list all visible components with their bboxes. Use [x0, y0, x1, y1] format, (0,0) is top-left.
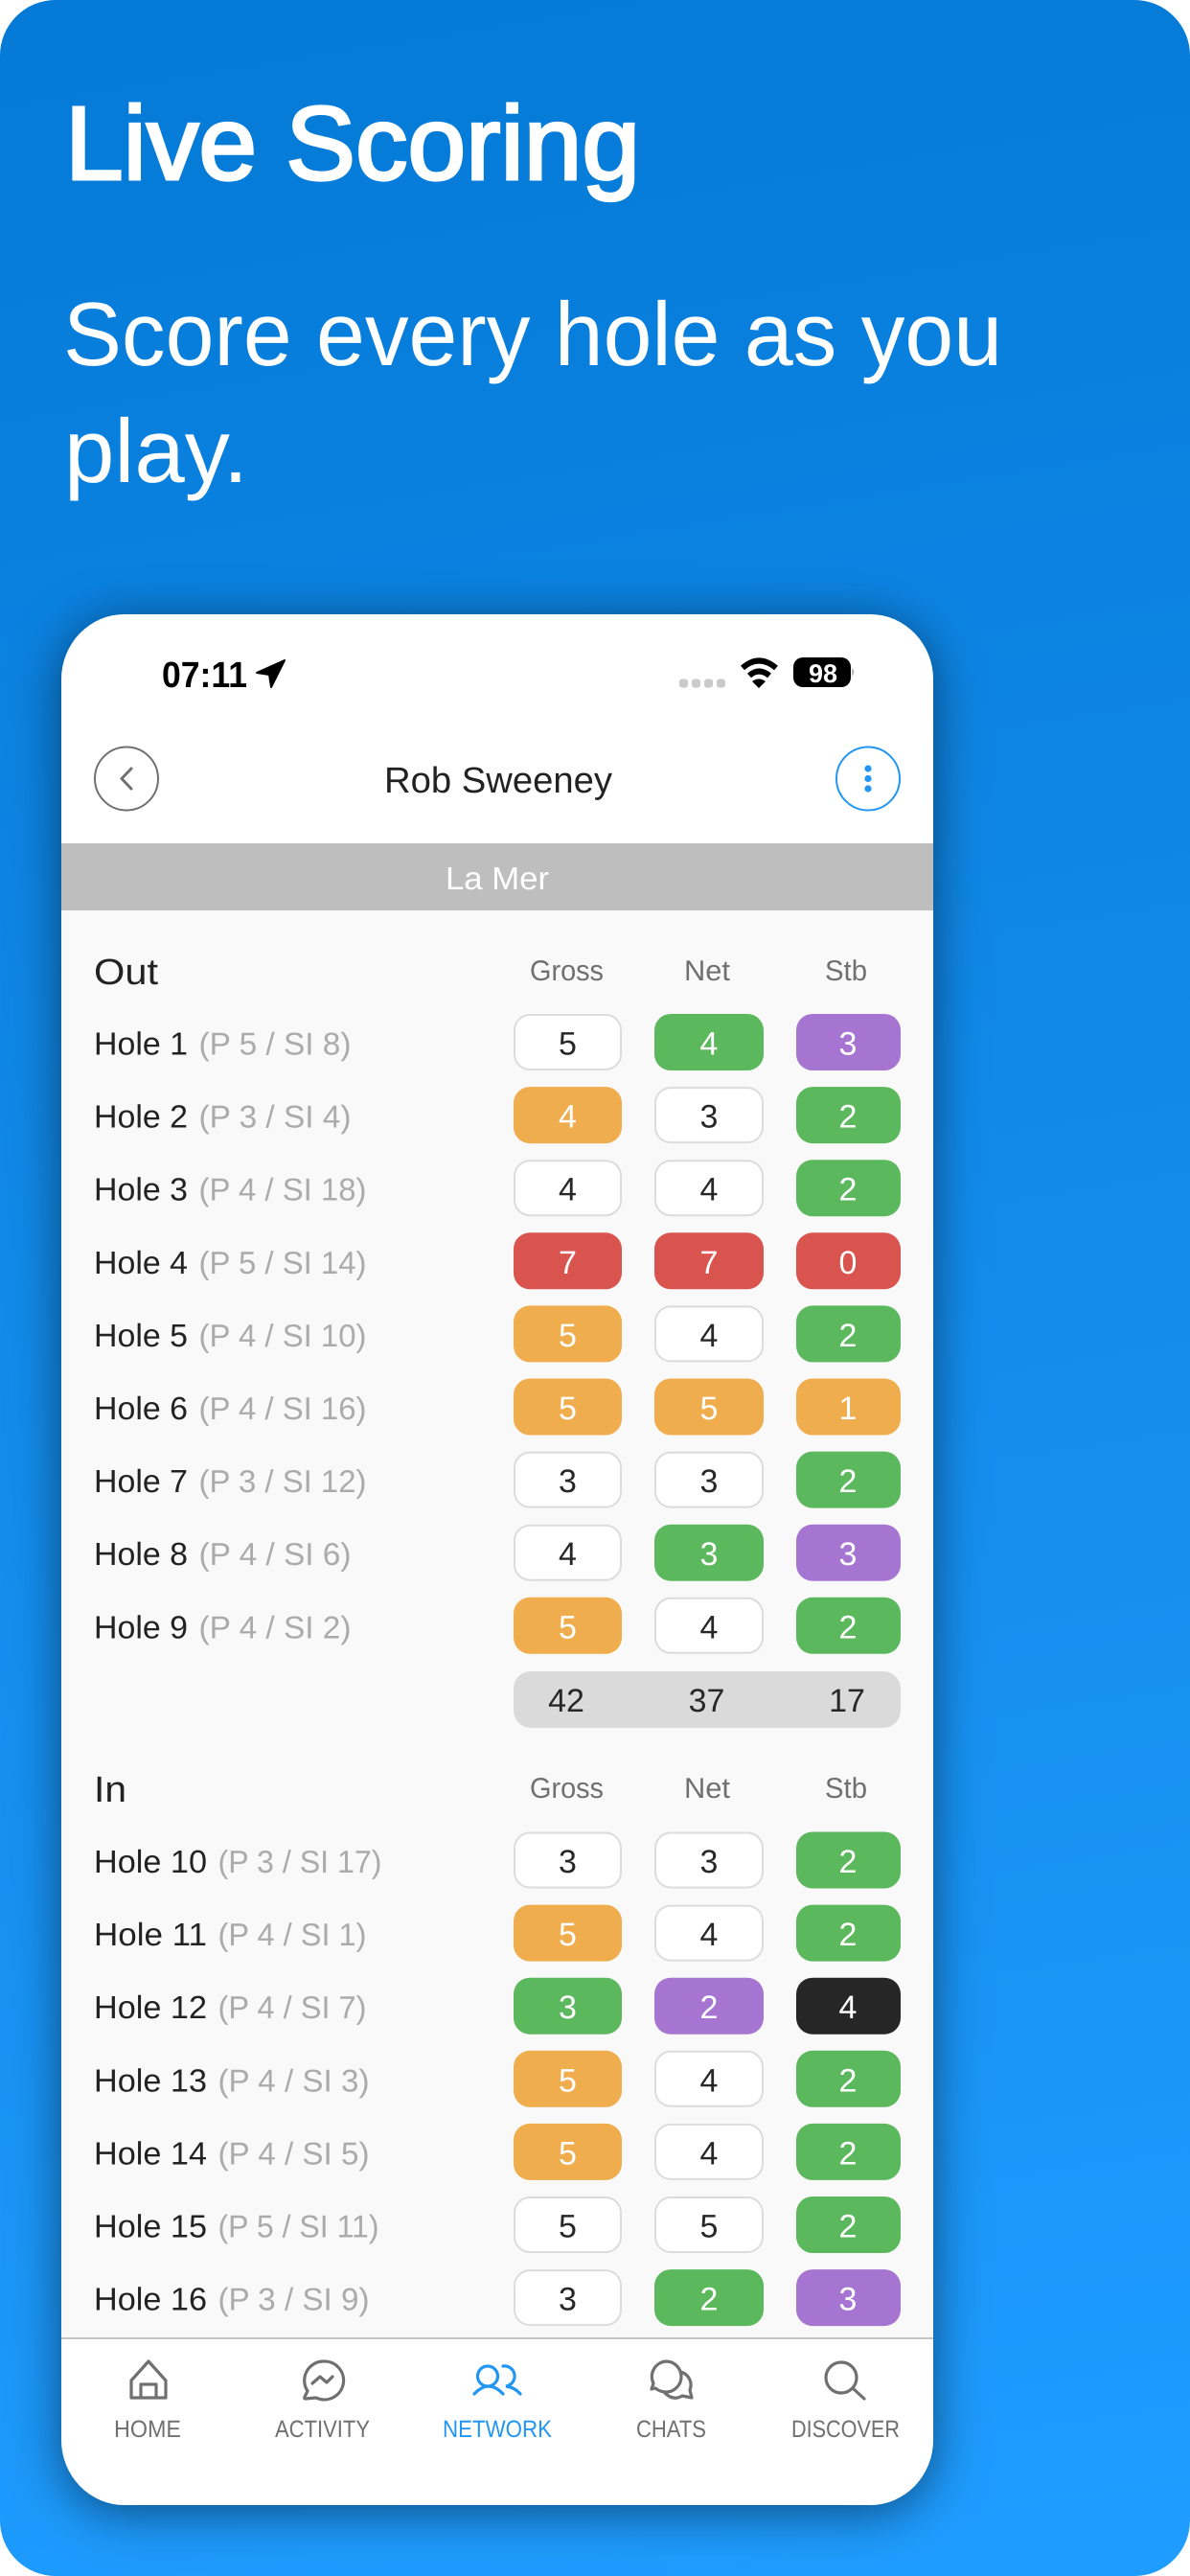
subtitle — [63, 284, 1002, 501]
row: hole 4: 7 — [559, 1245, 577, 1281]
row: hole 12: (P 4 / SI 7) — [218, 1990, 366, 2025]
row: hole 9: (P 4 / SI 2) — [199, 1609, 351, 1644]
row: hole 1: 5 — [559, 1025, 577, 1062]
row: hole 4: (P 5 / SI 14) — [199, 1245, 366, 1280]
nav item: home — [114, 2361, 181, 2443]
row: hole 11: (P 4 / SI 1) — [218, 1917, 366, 1952]
status bar — [162, 656, 855, 696]
row: hole 11: 4 — [700, 1917, 718, 1953]
nav item: home: HOME — [114, 2416, 181, 2443]
row: hole 10: (P 3 / SI 17) — [218, 1844, 381, 1879]
row: hole 14: 4 — [700, 2135, 718, 2172]
nav item: chats — [636, 2361, 706, 2443]
row: hole 8: Hole 8 — [94, 1537, 188, 1573]
row: hole 16: Hole 16 — [94, 2283, 207, 2318]
row: hole 4 — [94, 1232, 901, 1289]
row: hole 11: Hole 11 — [94, 1918, 207, 1953]
scorecard body — [61, 910, 933, 2337]
status bar: 98 — [809, 659, 837, 688]
row: hole 6: Hole 6 — [94, 1392, 188, 1427]
row: hole 2: 3 — [700, 1099, 718, 1136]
row: hole 13: 4 — [700, 2062, 718, 2099]
row: hole 11 — [94, 1905, 901, 1962]
row: hole 7: 2 — [839, 1463, 857, 1500]
row: hole 7: Hole 7 — [94, 1464, 188, 1500]
row: hole 16 — [94, 2269, 901, 2326]
row: hole 2: Hole 2 — [94, 1100, 188, 1136]
out section header: Gross — [530, 955, 604, 987]
row: hole 10 — [94, 1832, 901, 1888]
row: hole 5 — [94, 1305, 901, 1362]
row: hole 3: Hole 3 — [94, 1173, 188, 1208]
row: hole 12: 2 — [700, 1990, 718, 2026]
row: hole 16: 3 — [839, 2282, 857, 2318]
row: hole 9: 2 — [839, 1609, 857, 1645]
row: hole 1: Hole 1 — [94, 1027, 188, 1062]
out section header: Net — [684, 955, 731, 987]
row: hole 7: 3 — [700, 1463, 718, 1500]
row: hole 5: 4 — [700, 1318, 718, 1354]
nav item: chats: CHATS — [636, 2416, 706, 2443]
row: hole 2: 2 — [839, 1099, 857, 1136]
row: hole 8: (P 4 / SI 6) — [199, 1536, 351, 1572]
row: hole 14: Hole 14 — [94, 2136, 207, 2172]
nav item: discover: DISCOVER — [791, 2416, 900, 2443]
row: hole 2 — [94, 1087, 901, 1143]
row: hole 5: 5 — [559, 1318, 577, 1354]
out section header — [94, 953, 867, 993]
row: hole 13 — [94, 2051, 901, 2107]
out totals: 37 — [689, 1683, 724, 1719]
row: hole 6: 5 — [700, 1391, 718, 1427]
status bar: 07:11 — [162, 656, 247, 696]
row: hole 10: 2 — [839, 1844, 857, 1880]
row: hole 1 — [94, 1014, 901, 1070]
row: hole 6: 5 — [559, 1391, 577, 1427]
row: hole 2: (P 3 / SI 4) — [199, 1099, 351, 1135]
in section header: Net — [684, 1773, 731, 1805]
out totals — [514, 1671, 901, 1728]
phone screen panel — [61, 614, 933, 2505]
row: hole 10: 3 — [700, 1844, 718, 1880]
row: hole 9 — [94, 1598, 901, 1654]
row: hole 8 — [94, 1525, 901, 1581]
row: hole 10: 3 — [559, 1844, 577, 1880]
in section header: In — [94, 1770, 126, 1810]
row: hole 9: 5 — [559, 1609, 577, 1645]
menu button icon — [836, 748, 900, 811]
row: hole 9: Hole 9 — [94, 1610, 188, 1645]
row: hole 14: (P 4 / SI 5) — [218, 2135, 370, 2171]
player name heading: Rob Sweeney — [384, 761, 612, 801]
row: hole 12: 3 — [559, 1990, 577, 2026]
row: hole 7: (P 3 / SI 12) — [199, 1463, 366, 1499]
back button icon — [95, 748, 158, 811]
row: hole 12: 4 — [839, 1990, 857, 2026]
row: hole 7: 3 — [559, 1463, 577, 1500]
course banner — [61, 843, 933, 910]
out totals: 17 — [829, 1683, 865, 1719]
row: hole 1: 3 — [839, 1025, 857, 1062]
row: hole 15 — [94, 2196, 901, 2253]
subtitle: Score every hole as you — [63, 284, 1002, 384]
row: hole 8: 3 — [839, 1536, 857, 1573]
nav item: activity — [275, 2361, 370, 2443]
row: hole 9: 4 — [700, 1609, 718, 1645]
subtitle: play. — [64, 401, 248, 501]
row: hole 14 — [94, 2124, 901, 2180]
nav item: activity: ACTIVITY — [275, 2416, 370, 2443]
row: hole 5: 2 — [839, 1318, 857, 1354]
row: hole 10: Hole 10 — [94, 1845, 207, 1880]
row: hole 3: 2 — [839, 1172, 857, 1208]
nav item: network — [443, 2366, 552, 2443]
row: hole 4: 0 — [839, 1245, 857, 1281]
row: hole 12: Hole 12 — [94, 1990, 207, 2026]
row: hole 3 — [94, 1160, 901, 1216]
row: hole 13: (P 4 / SI 3) — [218, 2062, 370, 2098]
row: hole 3: 4 — [559, 1172, 577, 1208]
row: hole 15: 2 — [839, 2208, 857, 2244]
nav item: discover — [791, 2362, 900, 2443]
row: hole 6: (P 4 / SI 16) — [199, 1391, 366, 1426]
nav item: network: NETWORK — [443, 2416, 552, 2443]
row: hole 8: 3 — [700, 1536, 718, 1573]
row: hole 16: 2 — [700, 2282, 718, 2318]
row: hole 7 — [94, 1452, 901, 1508]
in section header: Gross — [530, 1773, 604, 1805]
row: hole 12 — [94, 1978, 901, 2035]
row: hole 15: 5 — [700, 2208, 718, 2244]
row: hole 8: 4 — [559, 1536, 577, 1573]
row: hole 5: (P 4 / SI 10) — [199, 1318, 366, 1353]
row: hole 13: 5 — [559, 2062, 577, 2099]
out section header: Out — [94, 953, 158, 993]
row: hole 11: 2 — [839, 1917, 857, 1953]
course banner: La Mer — [446, 862, 549, 897]
row: hole 14: 5 — [559, 2135, 577, 2172]
out totals: 42 — [548, 1683, 584, 1719]
row: hole 4: 7 — [700, 1245, 718, 1281]
row: hole 2: 4 — [559, 1099, 577, 1136]
row: hole 5: Hole 5 — [94, 1319, 188, 1354]
row: hole 6: 1 — [839, 1391, 857, 1427]
row: hole 13: 2 — [839, 2062, 857, 2099]
row: hole 1: 4 — [700, 1025, 718, 1062]
row: hole 1: (P 5 / SI 8) — [199, 1025, 351, 1062]
row: hole 15: Hole 15 — [94, 2210, 207, 2244]
row: hole 6 — [94, 1378, 901, 1436]
row: hole 14: 2 — [839, 2135, 857, 2172]
in section header — [94, 1770, 867, 1810]
row: hole 13: Hole 13 — [94, 2063, 207, 2099]
row: hole 16: (P 3 / SI 9) — [218, 2282, 370, 2317]
row: hole 3: (P 4 / SI 18) — [199, 1172, 366, 1208]
in section header: Stb — [825, 1773, 867, 1805]
out section header: Stb — [825, 955, 867, 987]
row: hole 15: 5 — [559, 2208, 577, 2244]
row: hole 16: 3 — [559, 2282, 577, 2318]
row: hole 4: Hole 4 — [94, 1246, 188, 1281]
row: hole 11: 5 — [559, 1917, 577, 1953]
row: hole 3: 4 — [700, 1172, 718, 1208]
row: hole 15: (P 5 / SI 11) — [218, 2208, 379, 2244]
title: Live Scoring — [65, 85, 640, 202]
bottom navigation bar — [61, 2337, 933, 2443]
